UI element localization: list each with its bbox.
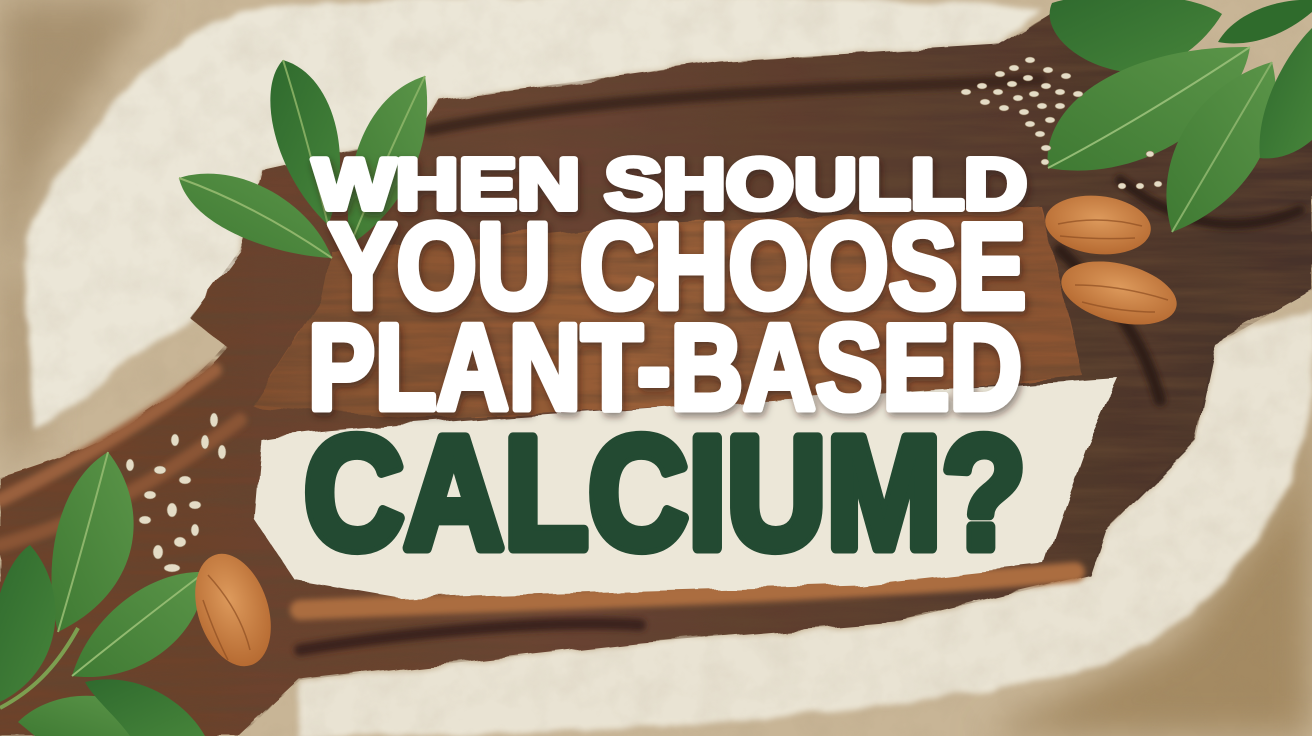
leaf sprig: top centre-left [179,60,427,258]
cream hollow [255,378,1118,598]
seeds [126,57,1162,572]
title line 4: highlighted word: CALCIUM? [304,403,1026,582]
title line 1: WHEN SHOULLD [313,145,1027,225]
almonds [182,191,1183,676]
bark highlights [0,80,1300,650]
title line 2: YOU CHOOSE [328,198,1026,334]
title [304,145,1027,582]
title line 3: PLANT-BASED [308,299,1022,435]
inner wood grain [254,206,1082,418]
leaf sprig: bottom left [0,452,205,736]
leaf sprig: top right [1048,0,1312,232]
